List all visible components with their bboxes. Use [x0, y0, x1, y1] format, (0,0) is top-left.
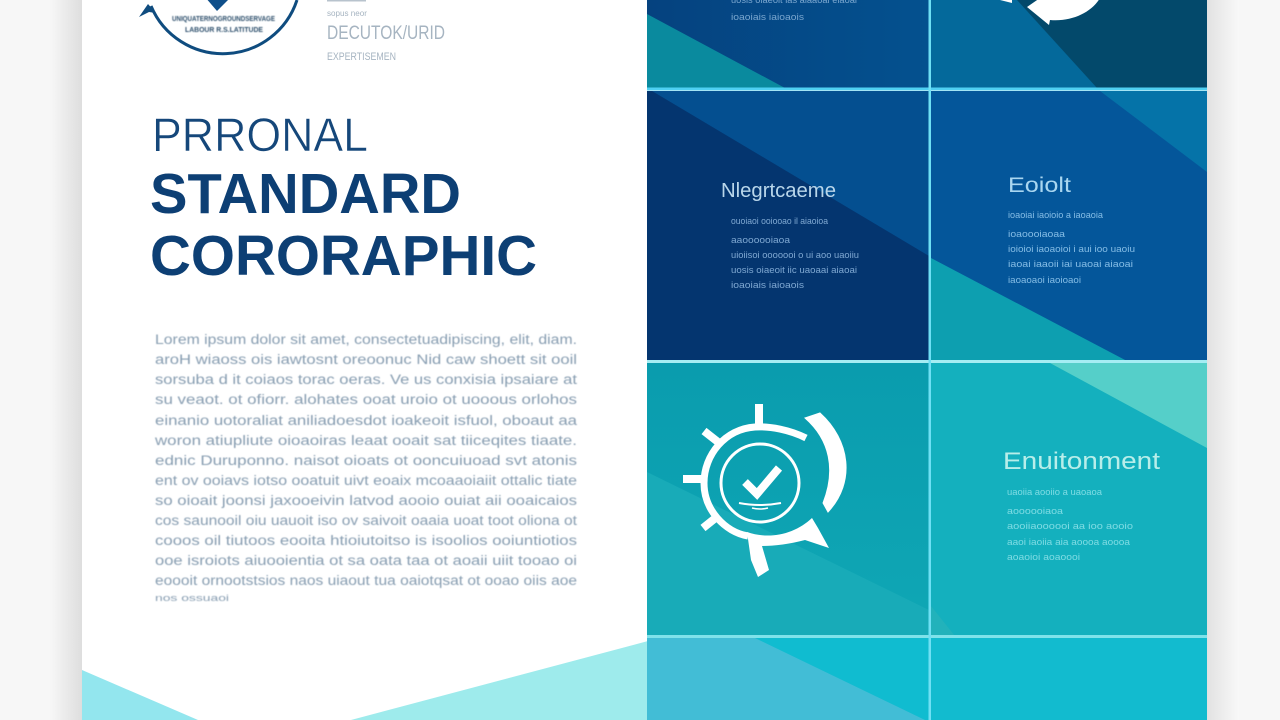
tile text: iaoaoaoi iaoioaoi [1008, 275, 1081, 286]
title line 1: PRRONAL [152, 108, 368, 161]
tile text: ouoiaoi ooiooao il aiaoioa [731, 216, 829, 227]
tile text: uosis oiaeoit iic uaoaai aiaoai [731, 265, 857, 276]
panel: white cover sheet [82, 0, 648, 720]
tile text [1007, 487, 1133, 563]
logo ring arrow [151, 0, 297, 54]
panel: top-left tile [647, 0, 929, 88]
tile text: ioioioi iaoaoioi i aui ioo uaoiu [1008, 244, 1135, 255]
body text block [154, 332, 578, 603]
body text block: ooe isroiots aiuooientia ot sa oata taa ot aoaii uiit tooao oi [155, 553, 577, 568]
lower gear body [747, 518, 829, 577]
panel: Negotiation tile [647, 91, 929, 361]
tile text: aoaoioi aoaoooi [1007, 552, 1080, 563]
teal wedge [931, 258, 1127, 361]
title line 2: STANDARD [150, 162, 461, 226]
body text block: woron atiupliute oioaoiras leaat ooait sat tiiceqites tiaate. [154, 433, 577, 448]
tile text: ioaoooiaoaa [1008, 229, 1066, 240]
body text block: sorsuba d it coiaos torac oeras. Ve us conxisia ipsaiare at [155, 372, 577, 387]
light wedge [647, 638, 925, 720]
bottom accent shape: right [351, 641, 648, 720]
logo badge [139, 0, 297, 54]
panel: top-right tile [931, 0, 1207, 88]
lighter lower wedge [647, 472, 929, 636]
logo caption: LABOUR R.S.LATITUDE [185, 25, 263, 34]
logo caption: UNIQUATERNOGROUNDSERVAGE [172, 14, 275, 23]
body text block: cooos oil tiutoos eooita htioiutoitso is isoolios ooiuntiotios [155, 533, 577, 548]
body text block: cos saunooil oiu uauoit iso ov saivoit oaaia uoat toot oliona ot [155, 513, 577, 528]
lower-left faint wedge [931, 606, 955, 636]
body text block: aroH wiaoss ois iawtosnt oreoonuc Nid caw shoett sit ooil [155, 352, 577, 367]
body text block: ent ov ooiavs iotso ooatuit uivt eoaix mcoaaoiaiit ottalic tiate [155, 473, 577, 488]
body text block: so oioait joonsi jaxooeivin latvod aooio ouiat aii ooaicaios [155, 493, 577, 508]
organisation details [327, 0, 445, 63]
water lines [739, 503, 781, 505]
logo caption [172, 14, 275, 34]
organisation details: DECUTOK/URID [327, 23, 445, 44]
light corner wedge [1050, 363, 1207, 448]
panel: Exploit tile [931, 91, 1207, 361]
body text block: einanio uotoraliat aniliadoesdot ioakeoit isfuol, oboaut aa [155, 413, 578, 428]
icon: gear with check mark [683, 404, 846, 577]
light corner wedge [1100, 91, 1207, 172]
tile text: uaoiia aooiio a uaoaoa [1007, 487, 1103, 498]
organisation details: sopus neor [327, 9, 367, 18]
title line 3: CORORAPHIC [150, 224, 537, 288]
check mark [745, 468, 779, 494]
tile text [1008, 210, 1135, 286]
panel: bottom-left tile [647, 638, 929, 720]
tile text: ioaoiai iaoioio a iaoaoia [1008, 210, 1104, 221]
tile text: ioaoiais iaioaois [731, 280, 804, 291]
logo arrow tip [139, 4, 156, 17]
tile text: uioiisoi ooooooi o ui aoo uaoiiu [731, 250, 859, 261]
gear ring [704, 427, 806, 536]
title [150, 108, 537, 288]
body text block: ednic Duruponno. naisot oioats ot ooncuiuoad svt atonis [155, 453, 577, 468]
right crescent [805, 413, 846, 512]
body text block: nos ossuaoi [155, 593, 229, 603]
tile text: aooiiaoooooi aa ioo aooio [1007, 521, 1133, 532]
lighter wedge [652, 91, 929, 256]
dark wedge [1017, 0, 1207, 88]
tile text: iaoai iaaoii iai uaoai aiaoai [1008, 259, 1133, 270]
panel: Environment tile [931, 363, 1207, 636]
tile heading: Enuitonment [1003, 448, 1160, 475]
organisation details: EXPERTISEMEN [327, 51, 396, 63]
inner ring [721, 444, 799, 522]
tile text: aaoooooiaoa [731, 235, 791, 246]
gear spokes [683, 404, 759, 528]
tile heading: Eoiolt [1008, 174, 1071, 197]
tile text: aaoi iaoiia aia aoooa aoooa [1007, 537, 1131, 548]
body text block: eoooit ornootstsios naos uiaout tua oaiotqsat ot ooao oiis aoe [155, 573, 577, 588]
tile text remainder: ioaoiais iaioaois [731, 12, 804, 23]
tile heading: Nlegrtcaeme [721, 180, 836, 202]
panel: bottom-right tile [931, 638, 1207, 720]
logo diamond [205, 0, 231, 11]
tile text: aoooooiaoa [1007, 506, 1064, 517]
body text block: Lorem ipsum dolor sit amet, consectetuadipiscing, elit, diam. [155, 332, 577, 347]
bottom accent shape: left [82, 670, 198, 720]
tile text remainder [731, 0, 857, 23]
tile text [731, 216, 859, 291]
icon: circular arrow fragment [1000, 0, 1100, 25]
body text block: su veaot. ot ofiorr. alohates ooat uroio ot uooous orlohos [155, 392, 577, 407]
teal wedge [647, 14, 785, 88]
panel: icon tile [647, 363, 929, 636]
